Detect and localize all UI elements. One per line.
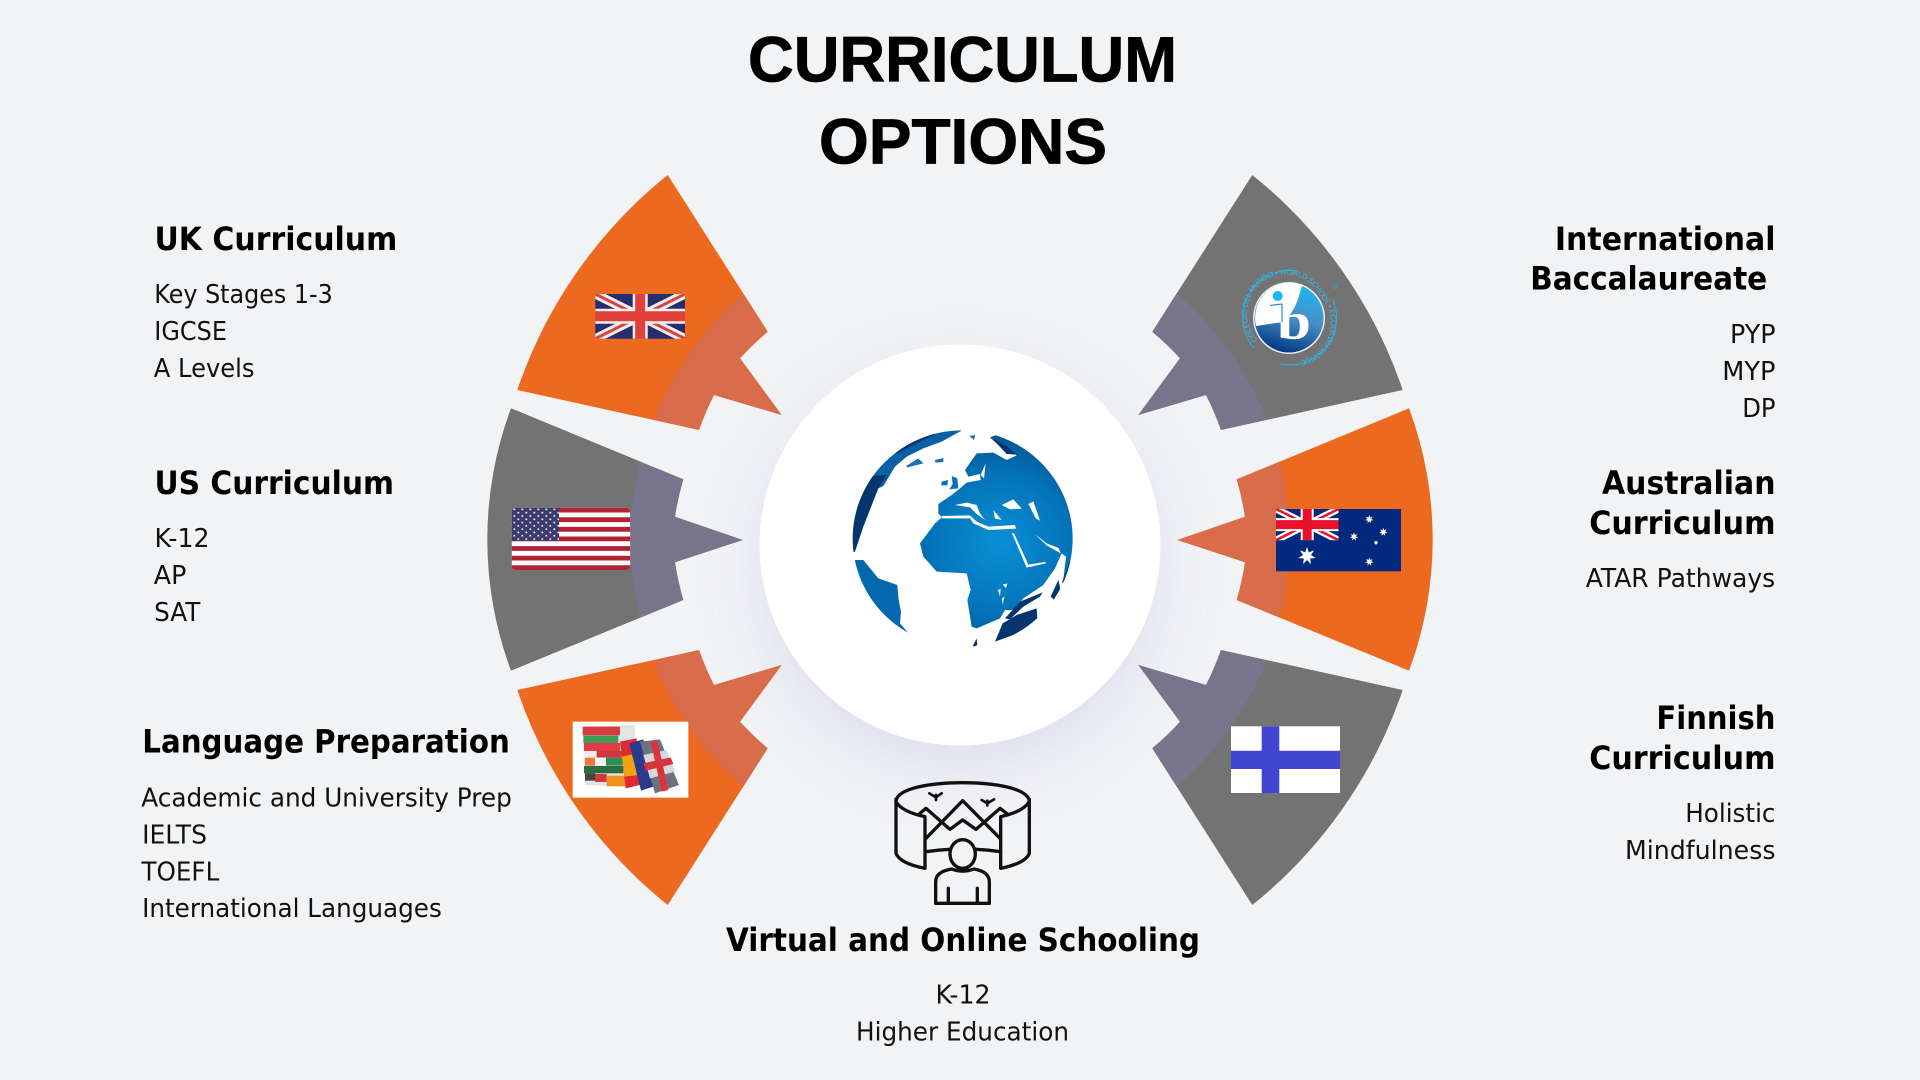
text block: International Baccalaureate: DP xyxy=(1742,394,1776,424)
wedge: US grey xyxy=(487,408,743,671)
text block: International Baccalaureate: PYP xyxy=(1730,320,1776,350)
text block: UK Curriculum: Key Stages 1-3 xyxy=(154,280,333,310)
text block: Virtual and Online Schooling: Higher Education xyxy=(856,1018,1069,1048)
text block: Language Preparation: International Languages xyxy=(142,894,442,924)
text block: UK Curriculum: UK Curriculum xyxy=(154,220,397,258)
flag: Finland xyxy=(1231,726,1340,793)
wedge: IB grey xyxy=(1138,175,1403,430)
text block: Australian Curriculum xyxy=(1586,464,1776,594)
logo: International Baccalaureate: COLEGIO DEL MUNDO • WORLD SCHOOL • ÉCOLE DU MONDE xyxy=(1242,269,1336,366)
title: OPTIONS xyxy=(819,106,1107,178)
text block: Language Preparation: Academic and University Prep xyxy=(141,783,512,813)
wedge: UK orange xyxy=(517,175,782,430)
text block: International Baccalaureate: Baccalaureate xyxy=(1530,260,1767,298)
text block: Language Preparation xyxy=(141,722,512,924)
title: CURRICULUM xyxy=(748,24,1177,96)
text block: Language Preparation: IELTS xyxy=(142,820,207,850)
text block: Australian Curriculum: ATAR Pathways xyxy=(1586,564,1775,594)
wedge: Australia orange xyxy=(1177,408,1433,671)
text block: Language Preparation: TOEFL xyxy=(141,857,220,887)
flag: Australia xyxy=(1276,509,1401,571)
text block: UK Curriculum: A Levels xyxy=(154,354,254,384)
text block: Australian Curriculum: Curriculum xyxy=(1589,504,1776,542)
text block: Virtual and Online Schooling xyxy=(726,921,1200,1048)
text block: International Baccalaureate: International xyxy=(1555,220,1775,258)
infographic: curriculum options xyxy=(141,36,1775,1046)
text block: US Curriculum: AP xyxy=(154,561,186,591)
wedge: language preparation orange xyxy=(517,650,782,905)
flag: United Kingdom xyxy=(595,294,685,339)
text block: Language Preparation: Language Preparation xyxy=(142,723,510,761)
text block: Finnish Curriculum: Curriculum xyxy=(1589,739,1776,777)
wedge: Finland grey xyxy=(1138,650,1403,905)
text block: Australian Curriculum: Australian xyxy=(1602,464,1776,502)
text block: US Curriculum: K-12 xyxy=(154,524,209,554)
text block: US Curriculum: SAT xyxy=(154,598,200,628)
logo: International Baccalaureate: b xyxy=(1277,294,1311,350)
text block: US Curriculum: US Curriculum xyxy=(154,464,394,502)
icon: globe xyxy=(852,430,1073,646)
image: language books xyxy=(573,722,688,798)
text block: Finnish Curriculum xyxy=(1589,699,1776,866)
text block: International Baccalaureate xyxy=(1530,220,1776,424)
text block: UK Curriculum: IGCSE xyxy=(154,317,227,347)
flag: United States xyxy=(512,508,630,570)
logo: International Baccalaureate: ® xyxy=(1332,283,1338,291)
text block: Virtual and Online Schooling: Virtual and Online Schooling xyxy=(726,921,1200,959)
text block: Finnish Curriculum: Holistic xyxy=(1685,799,1776,829)
center circle with glow xyxy=(760,344,1160,746)
text block: Virtual and Online Schooling: K-12 xyxy=(936,980,990,1010)
title xyxy=(748,24,1177,178)
text block: International Baccalaureate: MYP xyxy=(1722,357,1776,387)
text block: Finnish Curriculum: Finnish xyxy=(1656,699,1775,737)
icon: person in virtual environment xyxy=(896,783,1029,903)
text block: Finnish Curriculum: Mindfulness xyxy=(1625,836,1776,866)
text block: US Curriculum xyxy=(154,464,394,628)
text block: UK Curriculum xyxy=(154,220,397,384)
